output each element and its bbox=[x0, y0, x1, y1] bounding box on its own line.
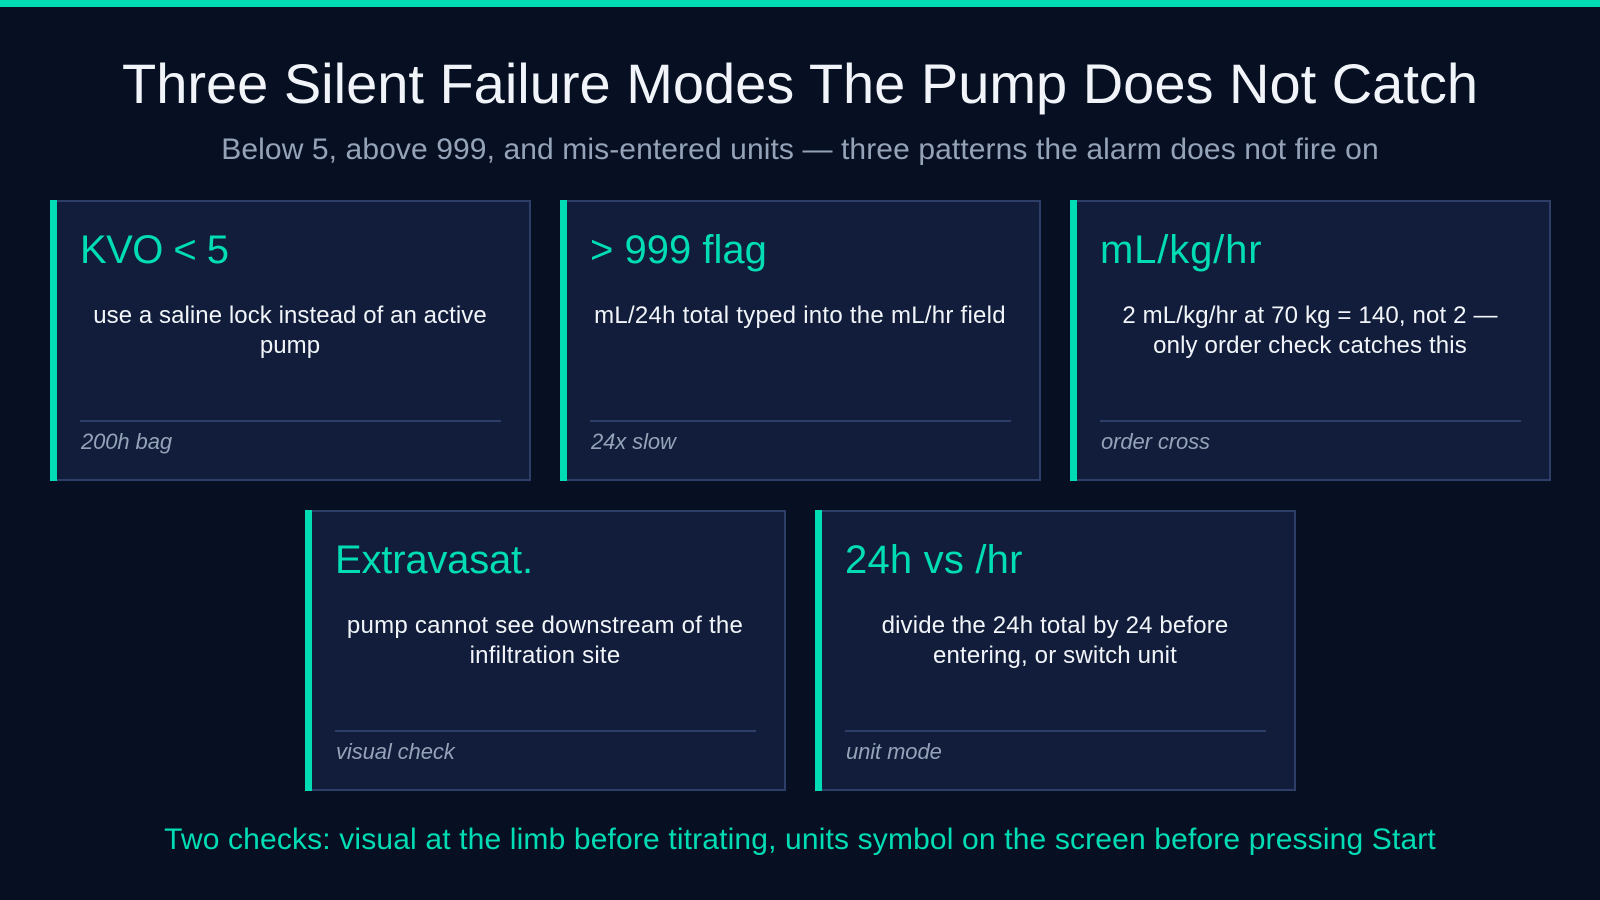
text: 24h vs /hr body: divide the 24h total by 24 before entering, or switch unit bbox=[882, 612, 1228, 669]
heading: Extravasat.: Extravasat. bbox=[335, 538, 533, 582]
subtitle: Below 5, above 999, and mis-entered units — three patterns the alarm does not fire on bbox=[221, 133, 1379, 166]
text: mL/kg/hr body: 2 mL/kg/hr at 70 kg = 140, not 2 — only order check catches this bbox=[1122, 302, 1498, 359]
tag: 24h vs /hr: unit mode bbox=[846, 739, 942, 764]
title: Three Silent Failure Modes The Pump Does Not Catch bbox=[122, 52, 1478, 115]
text: 999 flag body: mL/24h total typed into the mL/hr field bbox=[594, 302, 1006, 329]
text: Extravasation body: pump cannot see downstream of the infiltration site bbox=[347, 612, 743, 669]
heading: KVO: KVO < 5 bbox=[80, 228, 228, 272]
panel: 999 flag bbox=[560, 200, 1041, 481]
panel: mL/kg/hr bbox=[1070, 200, 1551, 481]
panel: 24h vs /hr bbox=[815, 510, 1296, 791]
panel: Extravasation bbox=[305, 510, 786, 791]
panel: KVO bbox=[50, 200, 531, 481]
top accent bar bbox=[0, 0, 1600, 7]
tag: 999 flag: 24x slow bbox=[591, 429, 676, 454]
tag: mL/kg/hr: order cross bbox=[1101, 429, 1210, 454]
heading: 999 flag: > 999 flag bbox=[590, 228, 767, 272]
footer takeaway: Two checks: visual at the limb before titrating, units symbol on the screen before pressing Start bbox=[164, 823, 1436, 856]
heading: mL/kg/hr: mL/kg/hr bbox=[1100, 228, 1262, 272]
text: KVO body: use a saline lock instead of an active pump bbox=[93, 302, 487, 359]
tag: KVO: 200h bag bbox=[81, 429, 172, 454]
tag: Extravasation: visual check bbox=[336, 739, 455, 764]
heading: 24h vs /hr: 24h vs /hr bbox=[845, 538, 1023, 582]
